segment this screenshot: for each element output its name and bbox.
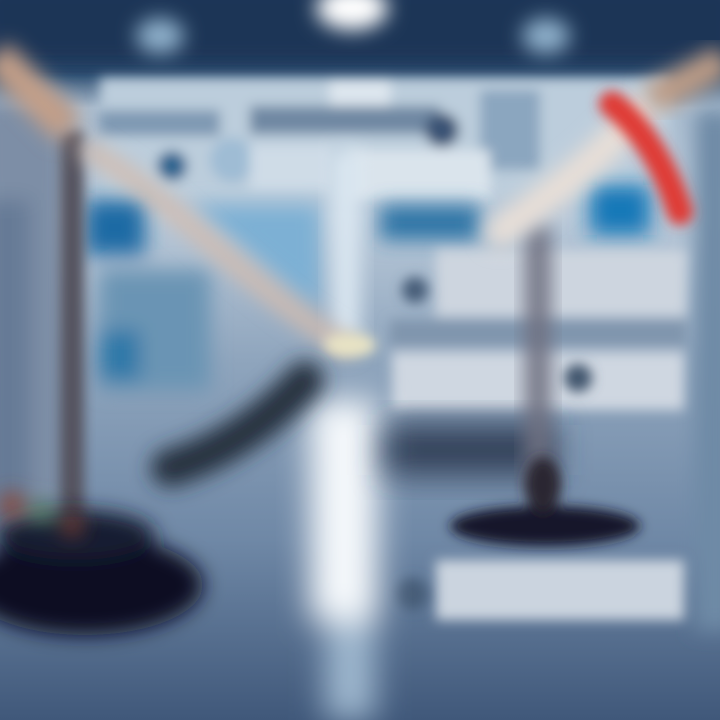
red ribbon bbox=[612, 104, 680, 212]
ceiling with lights bbox=[0, 0, 720, 65]
left dark pan bbox=[0, 510, 203, 635]
left arm bbox=[88, 150, 345, 346]
small panel dots bbox=[396, 277, 592, 610]
right floor shadow bbox=[385, 425, 555, 475]
shoulder right bbox=[650, 60, 720, 100]
shoulder left bbox=[0, 55, 70, 130]
floor light reflection bbox=[310, 400, 378, 720]
left scale pole bbox=[60, 130, 84, 520]
right scale pole bbox=[526, 225, 550, 490]
blue side patches bbox=[85, 185, 650, 390]
right dark pan bbox=[450, 457, 640, 546]
right column bbox=[695, 110, 720, 630]
right arm bbox=[500, 110, 640, 232]
central pillar bbox=[332, 150, 360, 340]
upper window band bbox=[100, 78, 670, 200]
right panels bbox=[390, 250, 686, 620]
colored base accents bbox=[0, 492, 83, 536]
left column bbox=[0, 100, 65, 530]
pivot glow bbox=[324, 333, 376, 357]
middle dark pan bbox=[170, 380, 305, 468]
